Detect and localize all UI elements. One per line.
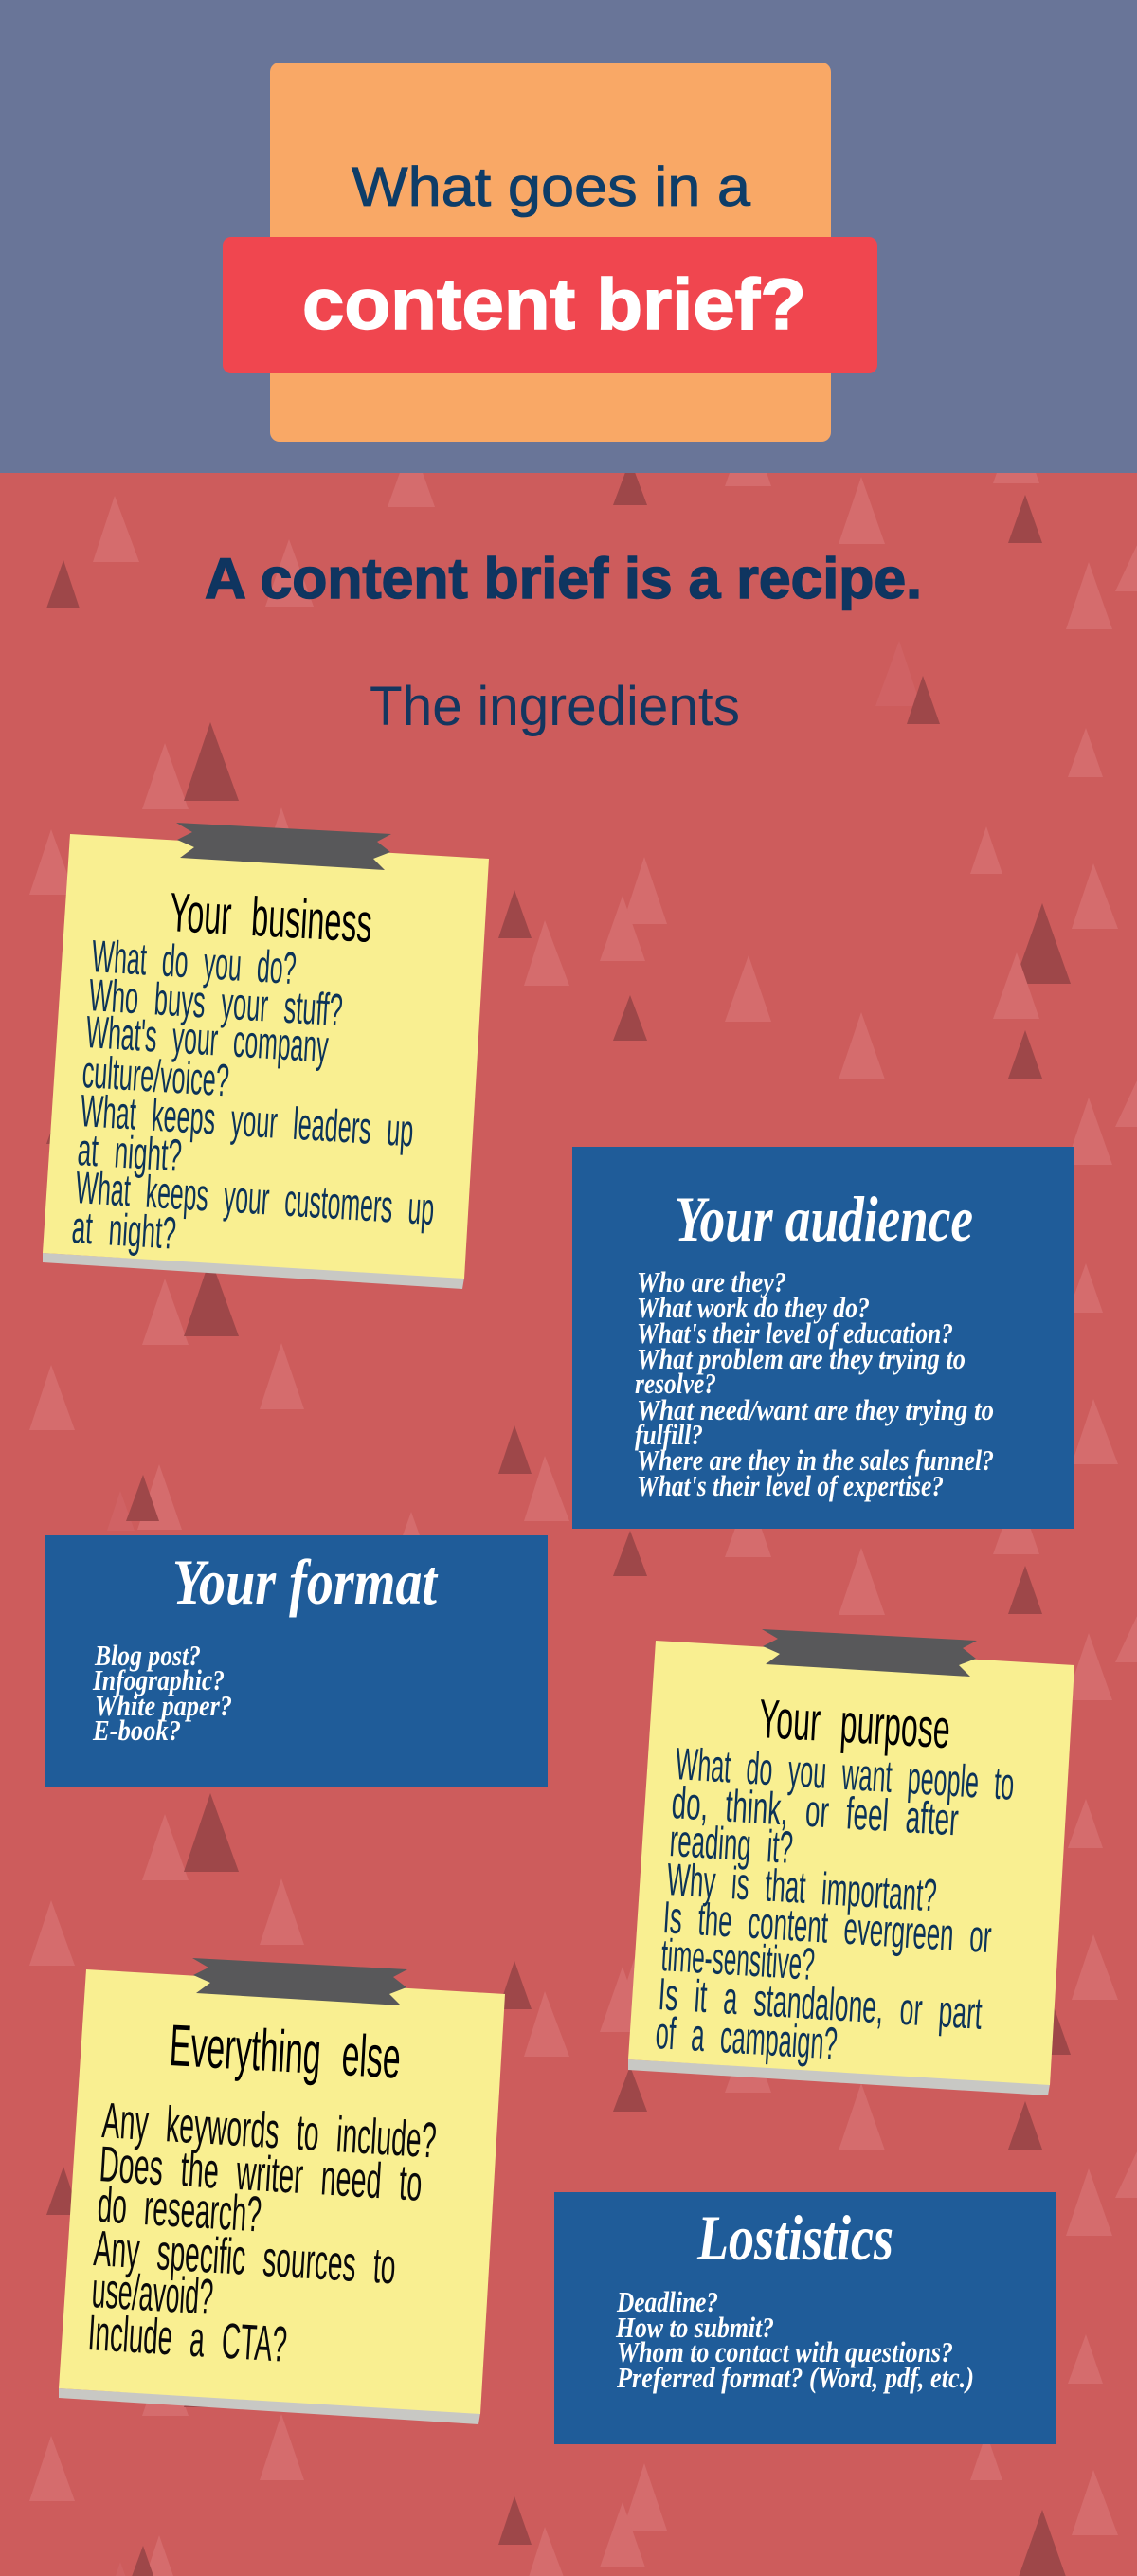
note heading: Everything else	[168, 2013, 403, 2092]
panel body: Deadline?	[616, 2285, 718, 2318]
panel: Lostistics	[554, 2192, 1056, 2444]
panel body: How to submit?	[615, 2311, 774, 2344]
note body: of a campaign?	[654, 2008, 839, 2070]
note body: What keeps your leaders up	[79, 1086, 415, 1156]
panel body: What problem are they trying to	[637, 1342, 966, 1375]
panel body: Who are they?	[637, 1265, 786, 1298]
panel body: What work do they do?	[637, 1291, 870, 1324]
title block	[223, 63, 877, 442]
note body	[70, 932, 436, 1260]
note body: do research?	[96, 2177, 263, 2243]
note body: Include a CTA?	[86, 2305, 288, 2373]
note body: Does the writer need to	[98, 2136, 424, 2212]
note body: What's your company	[84, 1007, 330, 1073]
panel body: What's their level of education?	[637, 1316, 953, 1350]
panel: header background	[0, 0, 1137, 473]
panel body: E-book?	[92, 1714, 181, 1747]
panel body: resolve?	[635, 1367, 716, 1400]
note body: What do you do?	[90, 932, 298, 994]
panel heading: Lostistics	[696, 2202, 893, 2274]
panel: Your audience	[572, 1147, 1074, 1529]
panel heading: Your format	[172, 1546, 439, 1618]
icon: tape	[192, 1958, 407, 2005]
panel body: Infographic?	[92, 1663, 225, 1696]
note heading: Your business	[168, 881, 374, 954]
panel body: fulfill?	[635, 1418, 703, 1451]
note body	[86, 2093, 438, 2373]
panel body: What need/want are they trying to	[637, 1393, 994, 1426]
note body: Any specific sources to	[92, 2221, 397, 2295]
note body: time-sensitive?	[659, 1931, 816, 1990]
note body: Who buys your stuff?	[87, 971, 344, 1036]
note body: at night?	[70, 1203, 177, 1260]
panel: sticky note Your business	[43, 823, 489, 1289]
icon: tape	[762, 1629, 977, 1677]
icon: tape	[176, 823, 391, 870]
panel body: White paper?	[95, 1689, 232, 1722]
panel body: Where are they in the sales funnel?	[637, 1443, 994, 1477]
note heading: Your purpose	[757, 1688, 952, 1760]
note body: What keeps your customers up	[74, 1163, 436, 1235]
note body: reading it?	[668, 1816, 794, 1874]
note body	[654, 1739, 1016, 2070]
panel body: Whom to contact with questions?	[617, 2335, 953, 2368]
panel: orange title card	[270, 63, 831, 442]
panel body	[615, 2285, 974, 2394]
panel body: What's their level of expertise?	[637, 1469, 944, 1502]
panel: sticky note Everything else	[59, 1958, 505, 2424]
panel heading: Your audience	[675, 1183, 973, 1255]
note body: use/avoid?	[90, 2262, 215, 2326]
heading: The ingredients: The ingredients	[370, 676, 740, 737]
title line: content brief?: content brief?	[302, 264, 806, 345]
panel: red title banner	[223, 237, 877, 373]
note body: at night?	[76, 1125, 183, 1182]
panel: sticky note Your purpose	[628, 1629, 1074, 2095]
note body: culture/voice?	[81, 1047, 230, 1106]
title line: What goes in a: What goes in a	[352, 156, 751, 218]
panel body	[635, 1265, 994, 1502]
panel body: Preferred format? (Word, pdf, etc.)	[616, 2361, 974, 2394]
note body: Any keywords to include?	[100, 2093, 438, 2169]
panel: Your format	[45, 1535, 548, 1787]
panel body: Blog post?	[94, 1639, 201, 1672]
panel body	[92, 1639, 232, 1747]
heading: A content brief is a recipe.: A content brief is a recipe.	[205, 547, 922, 610]
